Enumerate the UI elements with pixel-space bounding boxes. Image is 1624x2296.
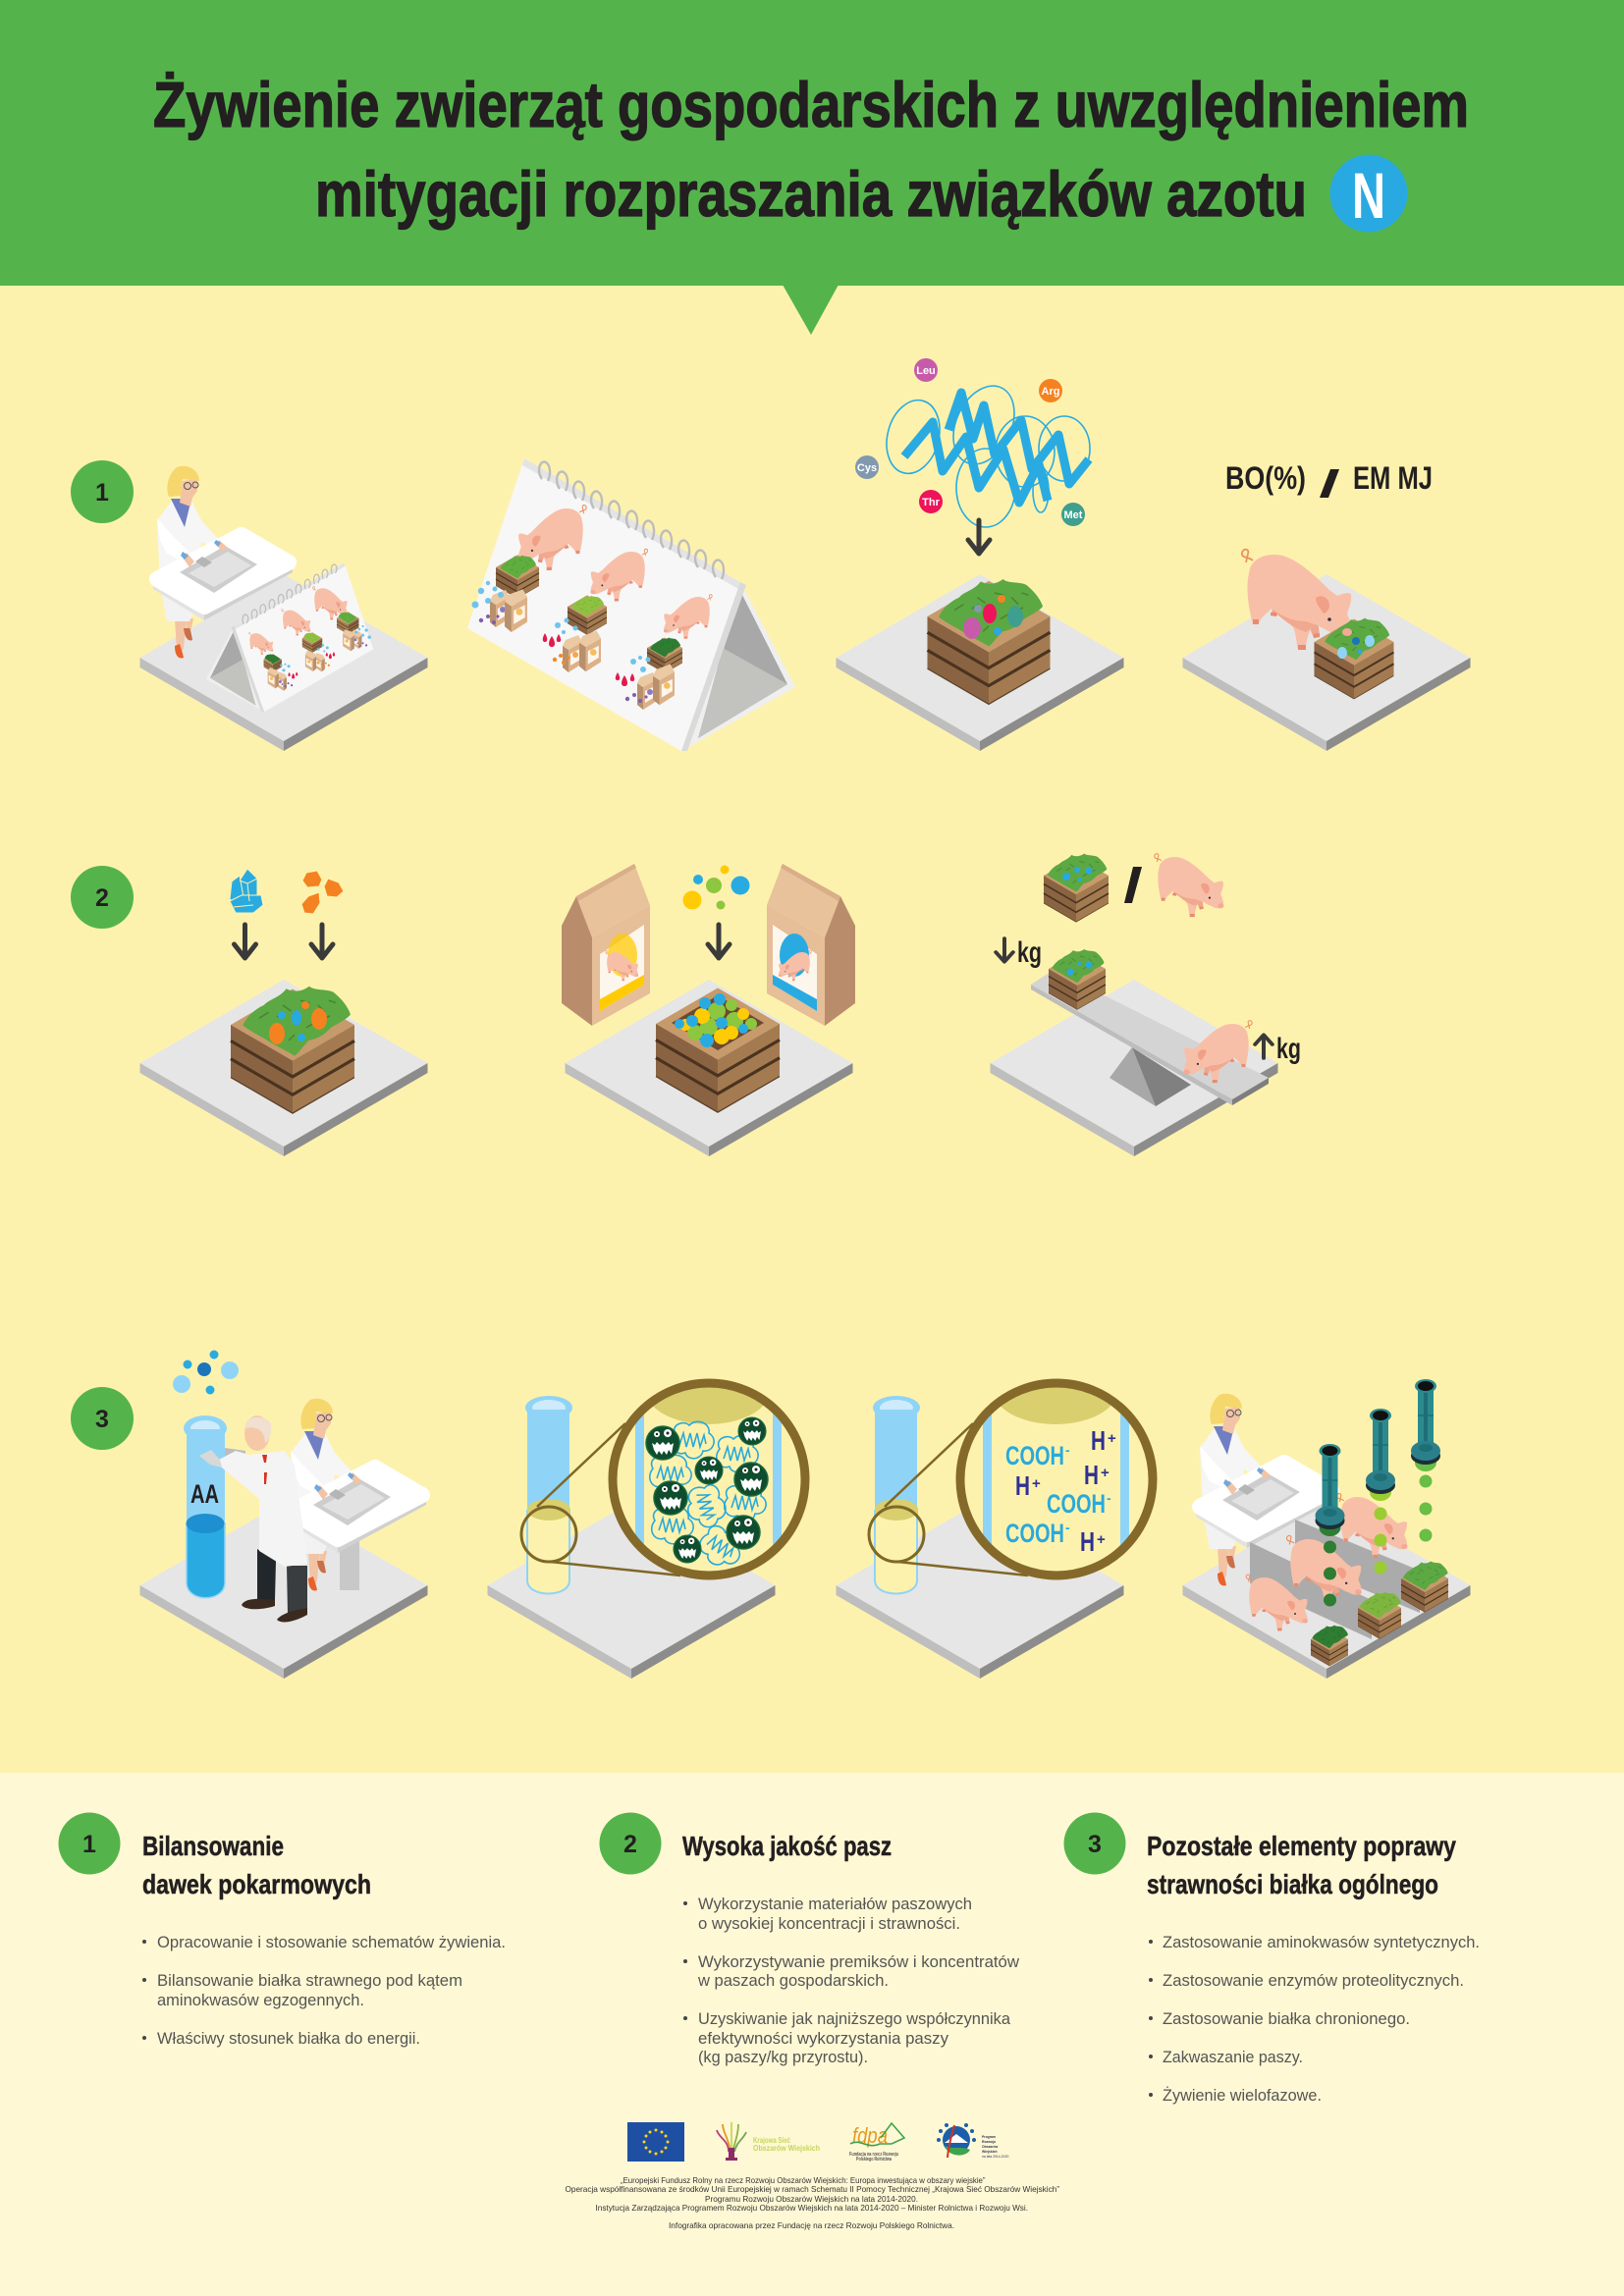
step marker 2 bbox=[71, 866, 134, 929]
pig A bbox=[1337, 1494, 1407, 1558]
crate with grass bbox=[231, 987, 354, 1113]
scene: feed with protein and mineral concentrates bbox=[139, 869, 428, 1156]
feed crate bbox=[927, 579, 1051, 704]
icon: nitrogen N badge bbox=[1329, 155, 1408, 232]
pyramid fulcrum bbox=[1110, 1047, 1191, 1106]
bullet list 3: Żywienie wielofazowe. bbox=[1163, 2086, 1322, 2105]
marker 1: 1 bbox=[82, 1831, 96, 1858]
bullet list 3: Zakwaszanie paszy. bbox=[1163, 2049, 1303, 2066]
heading 1 bbox=[142, 1831, 371, 1899]
scene: proteolytic enzymes magnifier bbox=[487, 1354, 807, 1679]
more weight label bbox=[1255, 1033, 1301, 1065]
ratio label: EM MJ bbox=[1353, 460, 1433, 496]
AA test tube: AA bbox=[190, 1479, 219, 1509]
ratio label: BO(%) bbox=[1225, 460, 1306, 496]
heading 2: Wysoka jakość pasz bbox=[682, 1831, 892, 1861]
pig bbox=[1242, 550, 1352, 650]
logo: FDPA: Fundacja na rzecz Rozwoju bbox=[849, 2152, 898, 2158]
pig on plank bbox=[1184, 1021, 1252, 1083]
feed bag left bbox=[562, 864, 650, 1026]
AA test tube bbox=[184, 1415, 227, 1598]
acid ions: + bbox=[1097, 1531, 1106, 1548]
arrow down bbox=[968, 520, 990, 554]
feed nozzle 3 with drops bbox=[1411, 1379, 1440, 1541]
microbes and proteins bbox=[646, 1417, 768, 1574]
bullet list 2 bbox=[683, 1896, 1019, 2066]
marker 1 bbox=[59, 1812, 120, 1875]
acid ions: + bbox=[1108, 1430, 1116, 1447]
back divider wall bbox=[1295, 1520, 1420, 1613]
scene: premixes and concentrates bbox=[562, 864, 855, 1156]
footer text: „Europejski Fundusz Rolny na rzecz Rozwoju Obszarów Wiejskich: Europa inwestująca w obszary wiejskie” bbox=[621, 2175, 986, 2185]
scene: synthetic amino acids, scientist and tube bbox=[139, 1351, 428, 1679]
pig snout over crate bbox=[1342, 628, 1352, 636]
desk pedestal bbox=[340, 1531, 359, 1590]
text column 3 bbox=[1064, 1812, 1480, 2105]
crate C bbox=[1311, 1626, 1348, 1666]
scene: specialist planning with feeding calendar bbox=[139, 466, 428, 751]
step marker 3 bbox=[71, 1387, 134, 1450]
footer text: Operacja współfinansowana ze środków Unii Europejskiej w ramach Schematu II Pomocy Technicznej „Krajowa Sieć Obszarów Wiejskich” bbox=[566, 2184, 1059, 2194]
logo: PROW: Obszarów bbox=[982, 2145, 999, 2149]
logo: FDPA: Polskiego Rolnictwa bbox=[856, 2157, 893, 2163]
technician at desk bbox=[1196, 1394, 1335, 1586]
crate on plank bbox=[1049, 949, 1106, 1009]
acid ions: H bbox=[1084, 1460, 1099, 1490]
acid ions: - bbox=[1065, 1520, 1070, 1535]
crate with premix bbox=[656, 988, 780, 1112]
bullet list 2: w paszach gospodarskich. bbox=[697, 1972, 889, 1990]
scientist bbox=[199, 1415, 307, 1623]
step marker 1: 1 bbox=[95, 479, 109, 507]
crate B bbox=[1358, 1592, 1401, 1638]
acid ions: - bbox=[1065, 1442, 1070, 1458]
logo: PROW: na lata 2014-2020 bbox=[982, 2155, 1008, 2159]
bullet list 1: Właściwy stosunek białka do energii. bbox=[157, 2030, 420, 2048]
marker 2 bbox=[599, 1812, 662, 1875]
logo: Krajowa Sieć Obszarów Wiejskich: Krajowa Sieć bbox=[753, 2136, 790, 2145]
marker 3 bbox=[1064, 1812, 1125, 1875]
lens ring bbox=[613, 1383, 805, 1575]
footer text: Instytucja Zarządzająca Programem Rozwoju Obszarów Wiejskich na lata 2014-2020 – Minister Rolnictwa i Rozwoju Wsi. bbox=[595, 2203, 1028, 2213]
heading 1: Bilansowanie bbox=[142, 1831, 284, 1861]
heading 3: Pozostałe elementy poprawy bbox=[1147, 1831, 1456, 1861]
bullet list 2: (kg paszy/kg przyrostu). bbox=[698, 2049, 868, 2066]
step marker 3: 3 bbox=[95, 1406, 109, 1433]
text column 1 bbox=[59, 1812, 506, 2048]
footer text bbox=[566, 2175, 1059, 2230]
text column 2 bbox=[599, 1812, 1019, 2066]
scene: phase feeding with nozzles bbox=[1182, 1379, 1471, 1679]
footer text: Programu Rozwoju Obszarów Wiejskich na lata 2014-2020. bbox=[705, 2194, 918, 2204]
arrows down bbox=[234, 925, 333, 958]
heading 3: strawności białka ogólnego bbox=[1147, 1869, 1438, 1899]
heading 3 bbox=[1147, 1831, 1456, 1899]
crate A bbox=[1401, 1561, 1448, 1612]
logo: FDPA bbox=[849, 2123, 904, 2163]
acid ions bbox=[1005, 1425, 1116, 1557]
lower text section background bbox=[0, 1773, 1624, 2296]
bullet list 2: efektywności wykorzystania paszy bbox=[698, 2030, 949, 2048]
logo: FDPA: fdpa bbox=[852, 2123, 888, 2148]
logo: PROW: Program bbox=[982, 2135, 996, 2139]
crate with feed bbox=[1314, 618, 1394, 699]
less feed label: kg bbox=[1017, 936, 1042, 969]
less feed label bbox=[996, 936, 1042, 969]
protein coil bbox=[879, 376, 1090, 527]
bullet list 2: Wykorzystanie materiałów paszowych bbox=[698, 1896, 972, 1913]
amino acid labels: Met bbox=[1064, 509, 1083, 521]
header band bbox=[0, 0, 1624, 335]
amino acid labels bbox=[855, 358, 1085, 526]
icon: nitrogen N badge: N bbox=[1352, 159, 1385, 232]
icon: blue crystals bbox=[230, 869, 263, 913]
technician at desk bbox=[287, 1399, 426, 1590]
amino acid labels: Cys bbox=[857, 462, 877, 474]
acid ions: + bbox=[1101, 1465, 1110, 1481]
title bbox=[153, 69, 1469, 230]
scene: protein to energy ratio, pig eating bbox=[1182, 460, 1471, 751]
seesaw plank bbox=[1031, 970, 1269, 1105]
arrow down bbox=[708, 925, 730, 958]
scene: amino acid protein above feed crate bbox=[837, 358, 1123, 751]
logo: EU flag bbox=[627, 2122, 684, 2162]
feed nozzle 2 with drops bbox=[1366, 1409, 1395, 1575]
crate ratio pig bbox=[1044, 854, 1223, 922]
ratio label bbox=[1225, 460, 1433, 498]
logo: Krajowa Sieć Obszarów Wiejskich: Obszarów Wiejskich bbox=[753, 2144, 820, 2153]
acid ions: H bbox=[1015, 1470, 1030, 1501]
acid ions: + bbox=[1032, 1475, 1041, 1492]
bullet list 1: Opracowanie i stosowanie schematów żywienia. bbox=[157, 1934, 506, 1951]
logo: PROW: Rozwoju bbox=[982, 2140, 996, 2144]
feed nozzle 1 with drops bbox=[1316, 1444, 1345, 1606]
icon: orange stones bbox=[301, 871, 344, 914]
bullet list 1: aminokwasów egzogennych. bbox=[157, 1992, 364, 2009]
front divider wall bbox=[1250, 1542, 1372, 1639]
bullet list 2: Uzyskiwanie jak najniższego współczynnika bbox=[698, 2010, 1011, 2028]
bullet list 2: o wysokiej koncentracji i strawności. bbox=[698, 1915, 960, 1933]
test tube with magnifier lens bbox=[869, 1354, 1155, 1594]
test tube with magnifier lens bbox=[521, 1354, 807, 1594]
acid ions: H bbox=[1091, 1425, 1106, 1456]
lens ring bbox=[960, 1383, 1153, 1575]
scene: feed conversion ratio seesaw bbox=[990, 854, 1301, 1156]
footer text: Infografika opracowana przez Fundację na rzecz Rozwoju Polskiego Rolnictwa. bbox=[669, 2220, 954, 2230]
acid ions: - bbox=[1107, 1490, 1111, 1506]
more weight label: kg bbox=[1276, 1033, 1301, 1065]
amino acid dots bbox=[173, 1351, 239, 1394]
title: mitygacji rozpraszania związków azotu bbox=[315, 158, 1307, 230]
amino acid labels: Thr bbox=[922, 497, 941, 508]
bullet list 3: Zastosowanie aminokwasów syntetycznych. bbox=[1163, 1934, 1480, 1951]
feed bag right bbox=[767, 864, 855, 1026]
amino acid labels: Leu bbox=[916, 365, 936, 377]
bullet list 3: Zastosowanie białka chronionego. bbox=[1163, 2010, 1410, 2028]
bullet list 3: Zastosowanie enzymów proteolitycznych. bbox=[1163, 1972, 1464, 1990]
bullet list 1 bbox=[142, 1934, 506, 2048]
scene: large feeding schedule calendar bbox=[467, 458, 795, 751]
heading 1: dawek pokarmowych bbox=[142, 1869, 371, 1899]
logo: Krajowa Sieć Obszarów Wiejskich bbox=[717, 2122, 820, 2161]
marker 3: 3 bbox=[1088, 1831, 1102, 1858]
bullet list 3 bbox=[1149, 1934, 1480, 2105]
scene: feed acidification magnifier bbox=[837, 1354, 1155, 1679]
pig C bbox=[1246, 1575, 1308, 1630]
step marker 2: 2 bbox=[95, 884, 109, 912]
logo: PROW bbox=[937, 2123, 1008, 2159]
amino acid labels: Arg bbox=[1042, 386, 1059, 398]
logo: PROW: Wiejskich bbox=[982, 2150, 998, 2154]
acid ions: COOH bbox=[1047, 1489, 1106, 1519]
bullet list 2: Wykorzystywanie premiksów i koncentratów bbox=[698, 1953, 1019, 1971]
coloured premix dots bbox=[683, 866, 750, 909]
pig B bbox=[1287, 1535, 1362, 1604]
step marker 1 bbox=[71, 460, 134, 523]
acid ions: COOH bbox=[1005, 1519, 1064, 1548]
acid ions: COOH bbox=[1005, 1441, 1064, 1470]
acid ions: H bbox=[1080, 1526, 1095, 1557]
marker 2: 2 bbox=[623, 1831, 637, 1858]
bullet list 1: Bilansowanie białka strawnego pod kątem bbox=[157, 1972, 462, 1990]
